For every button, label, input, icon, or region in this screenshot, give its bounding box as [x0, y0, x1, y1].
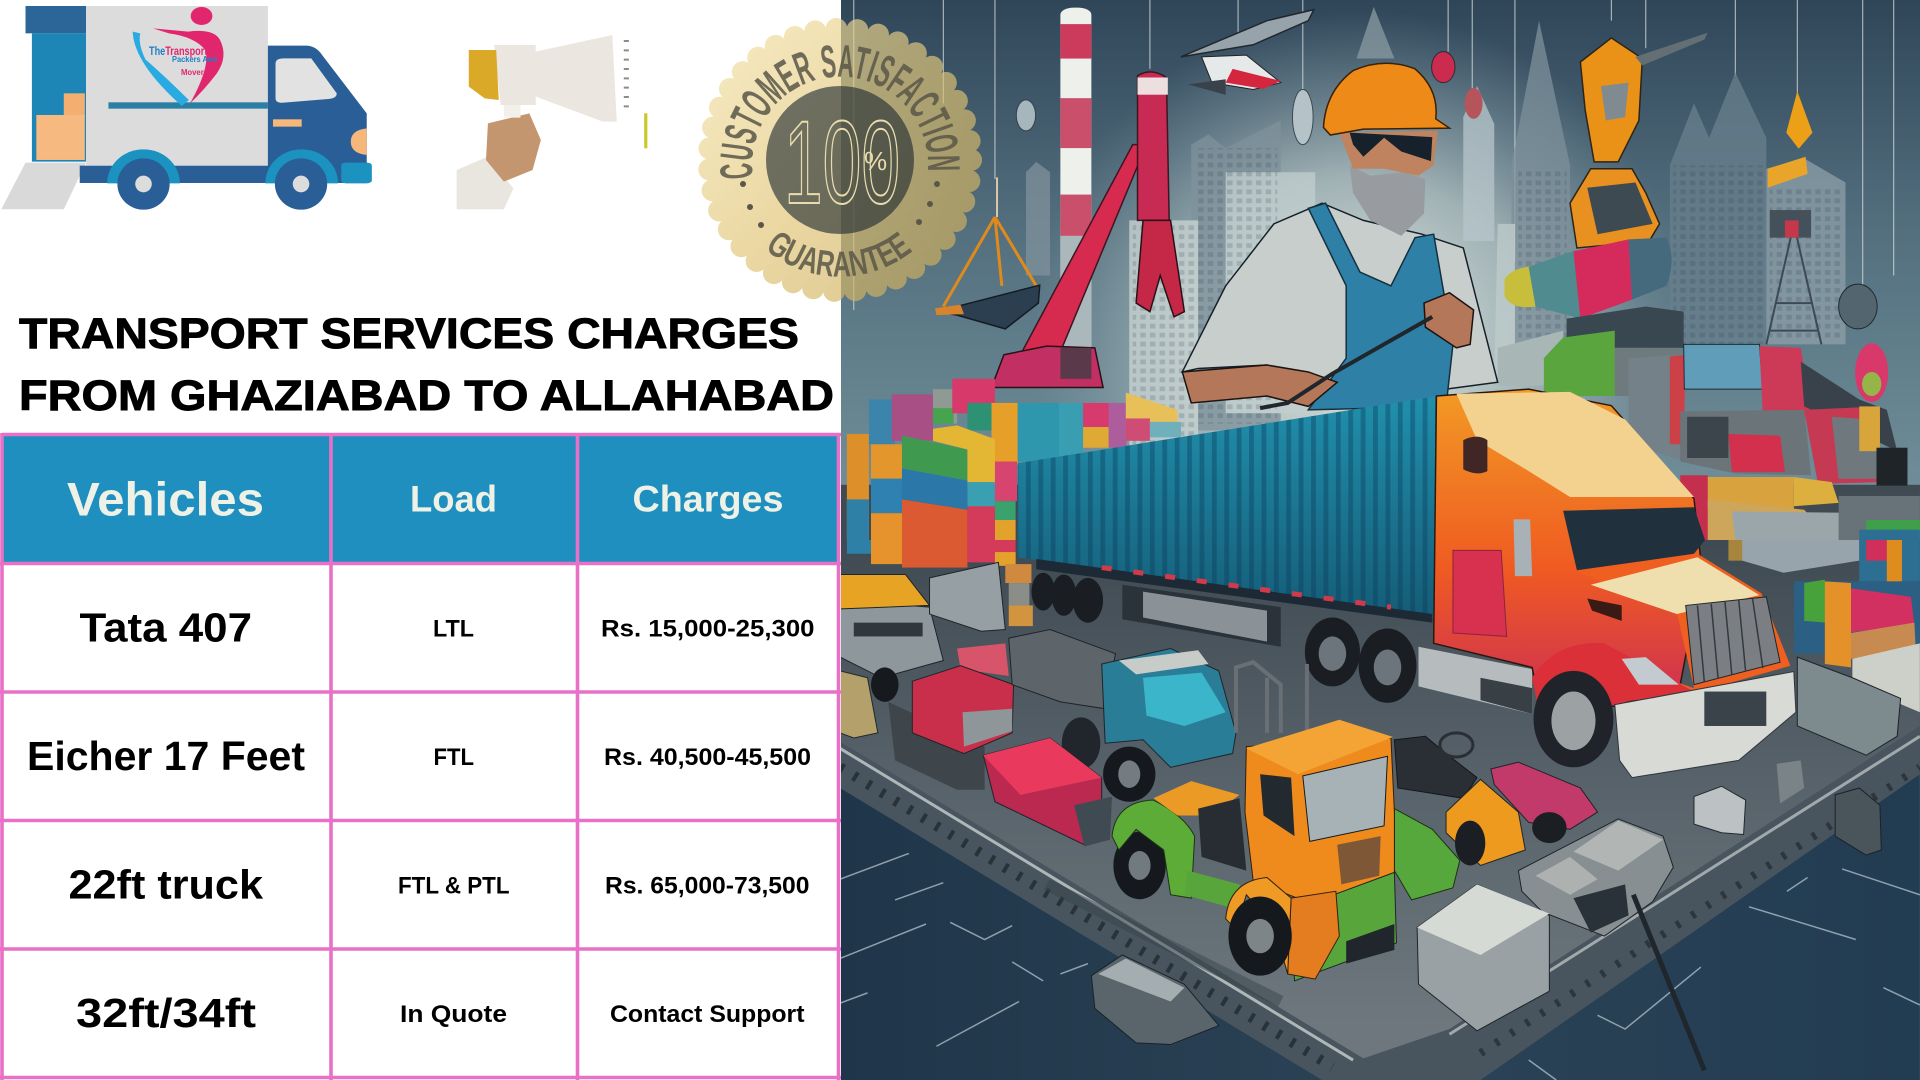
- logo pink heart: [153, 28, 224, 103]
- grab bucket: [935, 177, 1040, 329]
- windshield: [1303, 756, 1388, 841]
- overalls: [1308, 203, 1453, 410]
- small yellow truck: [840, 671, 878, 738]
- rear wheel: [1113, 832, 1166, 899]
- tyre pile: [1091, 955, 1219, 1045]
- fuel tank on stack: [1498, 238, 1684, 396]
- megaphone body: [494, 35, 617, 122]
- chassis: [80, 166, 348, 183]
- green rear fender: [1112, 800, 1195, 898]
- sound dots: [622, 40, 630, 112]
- cab body: [1434, 389, 1701, 719]
- row: Tata 407: Rs. 15,000-25,300: [601, 616, 814, 642]
- row: Tata 407: LTL: [433, 616, 474, 642]
- illustration sky background: [841, 0, 1920, 1080]
- fender red: [1532, 643, 1691, 704]
- right lattice tower: [1766, 224, 1821, 344]
- logo: truck: [1, 6, 372, 210]
- stripe: [108, 102, 268, 109]
- grille: [1686, 597, 1780, 685]
- row: 32ft/34ft: [76, 990, 804, 1036]
- row: 32ft/34ft: In Quote: [400, 1001, 507, 1028]
- logo subtitle: Packers And: [172, 55, 217, 64]
- icon: megaphone in hand: [457, 35, 647, 209]
- green side fender: [1394, 809, 1460, 900]
- pink car: [1491, 762, 1598, 829]
- hood vent: [1587, 599, 1622, 621]
- door lines: [1453, 550, 1507, 636]
- hood: [1590, 555, 1790, 690]
- sunglasses: [1350, 133, 1432, 161]
- small vehicles group left: [840, 562, 1307, 847]
- steering seat: [1394, 736, 1477, 798]
- pink box: [983, 738, 1102, 845]
- header: load: Load: [410, 478, 497, 520]
- platform ground: [840, 485, 1920, 1080]
- small aircraft: [1181, 10, 1314, 95]
- truck cargo interior: [26, 6, 86, 33]
- logo text: TheTransporter: [149, 44, 216, 58]
- building windows: [1133, 148, 1842, 444]
- seal curved text bottom: GUARANTEE: [769, 232, 912, 277]
- pole: [1633, 895, 1704, 1070]
- logo movers: Movers: [181, 68, 209, 77]
- trailer underbody: [1122, 585, 1281, 647]
- windshield: [1563, 507, 1705, 570]
- background trucks on right: [1629, 344, 1920, 540]
- front wheel: [1228, 896, 1292, 976]
- exhaust stacks: [1236, 662, 1307, 740]
- right crate stacks: [1728, 530, 1920, 755]
- wheel arches: [107, 149, 180, 183]
- small light box: [1694, 786, 1746, 834]
- striped chimney: [1060, 8, 1091, 353]
- shirt: [1182, 203, 1498, 396]
- hand: [486, 113, 541, 182]
- yellow rooftop: [1768, 157, 1808, 188]
- row: 22ft truck: 22ft truck: [68, 862, 263, 908]
- road: [840, 712, 1920, 1080]
- bottom of left container stacks: [847, 540, 1016, 568]
- yellow rear: [469, 50, 499, 100]
- row: Eicher 17 Feet: [27, 733, 811, 779]
- sleeve: [457, 157, 513, 209]
- cab side: [1245, 738, 1394, 905]
- cab roof: [1246, 720, 1393, 774]
- title line 1: TRANSPORT SERVICES CHARGES: [19, 310, 799, 358]
- title line 2: FROM GHAZIABAD TO ALLAHABAD: [19, 372, 834, 420]
- pricing table: [0, 433, 841, 1080]
- front wheel: [1534, 671, 1613, 767]
- row: Eicher 17 Feet: Eicher 17 Feet: [27, 733, 305, 779]
- seal 100 percent: 100: [784, 97, 900, 229]
- blue container: [1018, 396, 1438, 616]
- badge: customer satisfaction seal: [698, 18, 982, 302]
- red truck: [888, 702, 985, 790]
- row: Eicher 17 Feet: FTL: [434, 744, 474, 771]
- load: [1153, 781, 1239, 816]
- seal scalloped gold disc: [709, 29, 971, 291]
- bumper: [341, 163, 372, 183]
- side window: [1260, 774, 1295, 836]
- door handle: [273, 119, 302, 127]
- grey white truck: [840, 600, 943, 678]
- seal curved text top: CUSTOMER SATISFACTION: [720, 45, 960, 178]
- seal inner circle: [766, 86, 914, 234]
- grey machine: [1518, 819, 1673, 936]
- yellow sliver: [644, 113, 647, 148]
- main truck with blue container: [1018, 389, 1796, 778]
- table grid: [0, 433, 841, 1080]
- seal dots: [740, 181, 940, 228]
- handle: [504, 102, 520, 118]
- header: charges: Charges: [632, 478, 784, 520]
- red crane: [992, 72, 1184, 387]
- city skyline and hanging lamps: [854, 0, 1894, 448]
- kerb machine: [1835, 788, 1881, 855]
- row: 22ft truck: [68, 862, 810, 908]
- door vent: [1337, 836, 1381, 884]
- blue truck: [1009, 630, 1115, 709]
- worker in hard hat: [1182, 63, 1498, 410]
- wrench: [1260, 317, 1432, 408]
- row: Tata 407: Tata 407: [80, 604, 252, 650]
- wheels: [117, 158, 170, 210]
- face: [1339, 131, 1438, 176]
- row: Eicher 17 Feet: Rs. 40,500-45,500: [604, 744, 811, 771]
- row: 22ft truck: Rs. 65,000-73,500: [605, 872, 810, 900]
- beard: [1350, 165, 1425, 236]
- white box: [1417, 884, 1549, 1031]
- cab: [268, 46, 367, 173]
- bumper: [1615, 672, 1796, 778]
- headlight: [1622, 657, 1679, 685]
- forearm and hand: [1182, 365, 1337, 406]
- headlight: [351, 128, 367, 155]
- grey crate: [930, 562, 1005, 631]
- seal percent sign: %: [864, 146, 887, 176]
- orange and green truck: [1112, 720, 1598, 981]
- colourful container stacks on left: [847, 379, 1181, 540]
- ramp: [1, 163, 86, 209]
- fender: [1226, 878, 1291, 974]
- row: 22ft truck: FTL & PTL: [398, 872, 510, 900]
- orange hanging claw: [1570, 33, 1708, 248]
- orange rear cart: [1446, 779, 1525, 865]
- table header background: [2, 435, 840, 563]
- trailer wheels: [1031, 573, 1055, 611]
- cab roof fairing: [1456, 392, 1694, 497]
- logo blue hand: [133, 32, 189, 106]
- row: Tata 407: [80, 604, 814, 650]
- hard hat: [1323, 63, 1449, 135]
- machinery and boxes foreground: [1091, 760, 1881, 1070]
- title: [19, 310, 834, 420]
- row: 32ft/34ft: 32ft/34ft: [76, 990, 256, 1036]
- header: vehicles: Vehicles: [67, 472, 264, 526]
- logo head: [191, 7, 212, 25]
- cab window: [276, 58, 337, 103]
- pendant lamps: [1016, 52, 1888, 402]
- panel: transport illustration: [840, 0, 1920, 1080]
- fuel tank: [1419, 647, 1532, 714]
- peach crate: [957, 643, 1009, 676]
- row: 32ft/34ft: Contact Support: [610, 1001, 804, 1028]
- box body: [86, 6, 268, 165]
- green grille and bumper: [1291, 872, 1396, 981]
